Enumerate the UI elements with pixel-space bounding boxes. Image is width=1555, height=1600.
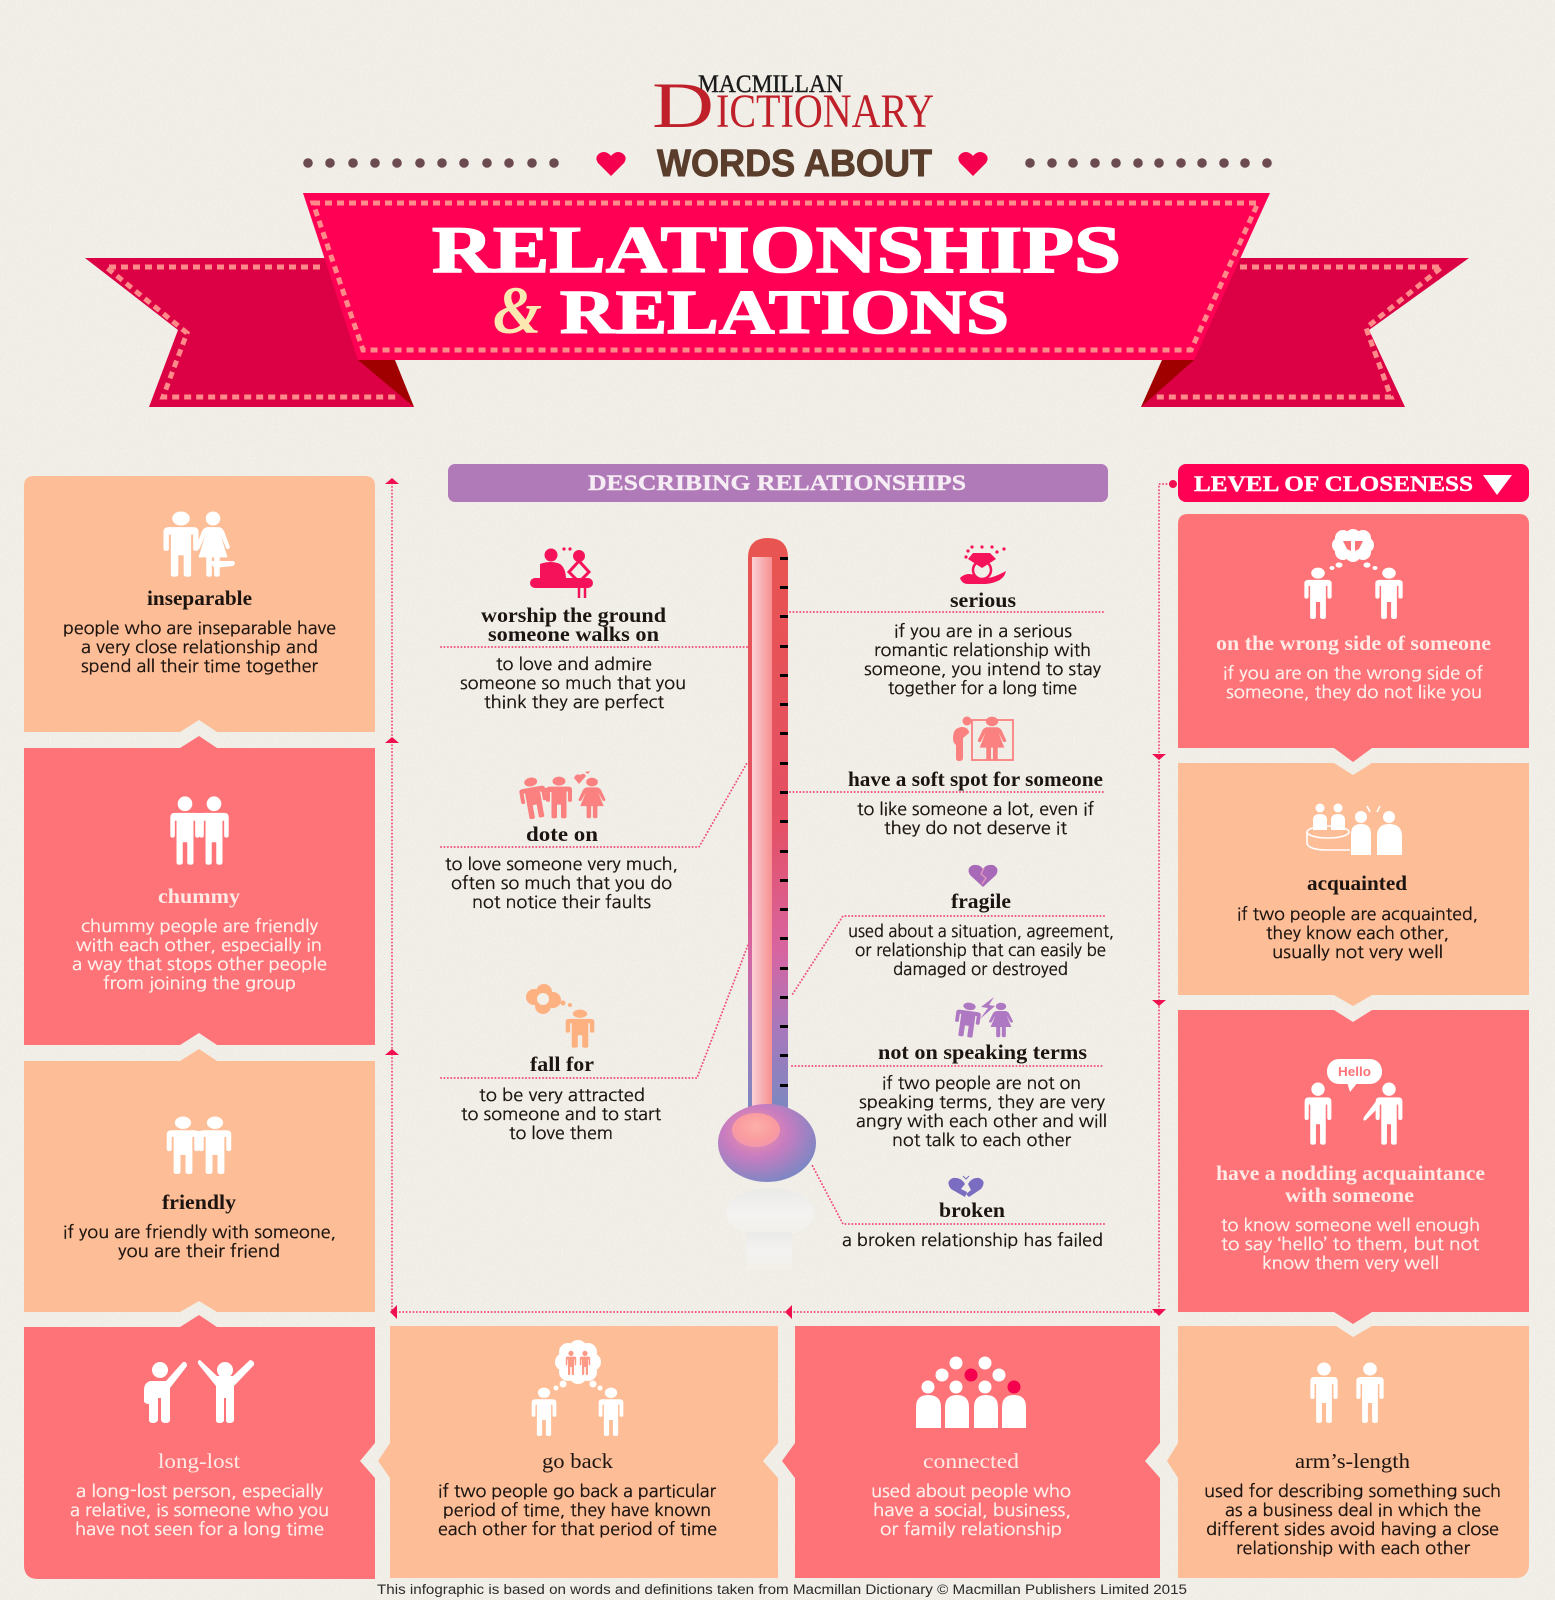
definition [856,1075,1107,1149]
definition: they do not deserve it [884,820,1068,837]
definition [70,1483,329,1538]
icon: two people saying hello [1305,1059,1402,1145]
title ribbon banner: RELATIONS [560,279,1009,347]
definition: if two people are not on [882,1075,1081,1092]
definition: not notice their faults [472,894,651,911]
definition: as a business deal in which the [1225,1502,1481,1519]
panel: acquainted [1178,763,1529,1006]
definition: someone so much that you [460,675,686,692]
term: broken [842,1176,1103,1249]
heading: fall for [530,1052,594,1076]
definition: damaged or destroyed [893,961,1068,978]
icon: inseparable couple [163,511,235,577]
definition: to like someone a lot, even if [857,801,1094,818]
dotted arrows around the closeness scale [385,478,1177,1319]
definition: a way that stops other people [72,956,327,973]
definition: if you are on the wrong side of [1223,665,1483,682]
definition: to be very attracted [479,1087,645,1104]
heading [1216,1161,1485,1207]
definition: if two people are acquainted, [1237,906,1478,923]
panel: have a nodding acquaintance with someone [1178,1010,1529,1324]
icon: two people with thought cloud [1304,529,1403,619]
heading: acquainted [1307,871,1407,895]
heading: have a nodding acquaintance [1216,1161,1485,1185]
definition: often so much that you do [451,875,672,892]
icon: two people saying hello: Hello [1338,1064,1371,1079]
definition [871,1483,1071,1538]
term: have a soft spot for someone [848,716,1103,837]
heading: worship the ground [481,603,666,627]
definition: used for describing something such [1204,1483,1501,1500]
header: describing relationships [448,464,1108,502]
definition: if two people go back a particular [438,1483,717,1500]
heading: with someone [1285,1183,1414,1207]
heading: long-lost [158,1449,240,1473]
heading: serious [950,588,1016,612]
definition: to someone and to start [461,1106,662,1123]
subtitle row: words about [303,143,1272,185]
definition [461,1087,662,1142]
header: describing relationships: DESCRIBING RELATIONSHIPS [588,470,966,495]
term: not on speaking terms [856,997,1107,1149]
icon: person and figure in frame [953,716,1013,761]
heading [481,603,666,646]
heading: chummy [158,884,241,908]
panel: inseparable [24,476,375,732]
definition: angry with each other and will [856,1113,1107,1130]
icon: person with cloud [526,984,594,1048]
definition: a very close relationship and [81,639,318,656]
definition [63,1224,336,1260]
term: serious [864,545,1101,697]
definition [1223,665,1483,701]
heading: friendly [162,1190,237,1214]
icon: thought cloud of pair between two people [532,1340,623,1436]
definition: or family relationship [880,1521,1062,1538]
term: fall for [461,984,662,1142]
definition: together for a long time [888,680,1077,697]
icon: table and people [1307,804,1402,855]
definition: a broken relationship has failed [842,1232,1103,1249]
logo: Macmillan Dictionary: ICTIONARY [716,85,934,138]
icon: friendly pair [167,1117,231,1174]
definition: if you are in a serious [894,623,1072,640]
definition [1204,1483,1501,1557]
definition: spend all their time together [81,658,319,675]
header: level of closeness: LEVEL OF CLOSENESS [1194,471,1473,496]
title ribbon banner: RELATIONSHIPS [432,213,1121,287]
logo: Macmillan Dictionary: MACMILLAN [698,71,843,98]
panel: connected [782,1326,1160,1578]
definition [848,923,1114,978]
definition: have a social, business, [873,1502,1071,1519]
definition: think they are perfect [484,694,665,711]
panel: on the wrong side of someone [1178,514,1529,762]
definition [1237,906,1478,961]
definition: or relationship that can easily be [855,942,1106,959]
definition [460,656,686,711]
definition: someone, you intend to stay [864,661,1101,678]
icon: worship [530,547,593,598]
definition: they know each other, [1266,925,1449,942]
definition: different sides avoid having a close [1206,1521,1499,1538]
icon: arguing couple [953,997,1013,1039]
definition: speaking terms, they are very [859,1094,1105,1111]
definition: people who are inseparable have [63,620,336,637]
heading: broken [939,1198,1005,1222]
icon: two people apart [1310,1362,1384,1423]
term: dote on [445,771,678,911]
definition: someone, they do not like you [1226,684,1482,701]
icon: cracked heart [969,865,997,887]
icon: chummy pair [170,796,229,865]
title ribbon banner [85,193,1469,407]
icon: broken heart [948,1176,984,1197]
term: worship the ground someone walks on [460,547,686,711]
heading: dote on [526,822,598,846]
definition: with each other, especially in [76,937,322,954]
panel: friendly [24,1049,375,1312]
icon: three figures with hearts [517,771,606,820]
heading: go back [542,1449,614,1473]
definition: relationship with each other [1236,1540,1471,1557]
definition: know them very well [1262,1255,1439,1272]
definition: to love and admire [496,656,652,673]
heading: not on speaking terms [878,1040,1087,1064]
definition [864,623,1101,697]
definition: to know someone well enough [1221,1217,1480,1234]
thermometer [718,538,816,1270]
heading: inseparable [147,586,252,610]
definition: a relative, is someone who you [70,1502,329,1519]
panel: go back [378,1326,778,1578]
definition: used about people who [871,1483,1071,1500]
definition: not talk to each other [892,1132,1072,1149]
icon: connected crowd [916,1356,1026,1428]
definition: have not seen for a long time [75,1521,324,1538]
title ribbon banner: & [493,272,542,348]
heading: on the wrong side of someone [1216,631,1491,655]
definition: from joining the group [103,975,296,994]
definition: a long-lost person, especially [76,1483,323,1500]
definition [857,801,1094,837]
definition: each other for that period of time [438,1521,717,1538]
definition [438,1483,717,1538]
panel: long-lost [24,1315,375,1579]
heading: connected [923,1449,1020,1473]
heading: arm’s-length [1295,1449,1411,1473]
logo: Macmillan Dictionary: D [652,70,714,142]
definition: usually not very well [1272,944,1443,961]
subtitle row: words about: WORDS ABOUT [657,143,932,185]
logo: Macmillan Dictionary [652,70,934,142]
definition [1221,1217,1480,1272]
definition: to love them [509,1125,613,1142]
definition: to love someone very much, [445,856,678,873]
definition: if you are friendly with someone, [63,1224,336,1241]
panel: arm's-length [1167,1326,1529,1578]
header: level of closeness [1178,464,1529,502]
panel: chummy [24,736,375,1045]
definition: romantic relationship with [874,642,1091,659]
icon: two people waving [144,1360,254,1423]
heading: have a soft spot for someone [848,767,1103,791]
heading: someone walks on [488,622,659,646]
footer credit: This infographic is based on words and definitions taken from Macmillan Dictionary © Macmillan Publishers Limited 2015 [377,1582,1187,1597]
thermometer leader lines [441,612,1104,1224]
definition: you are their friend [118,1243,280,1260]
definition [63,620,336,675]
definition: chummy people are friendly [81,918,318,935]
definition: used about a situation, agreement, [848,923,1114,940]
definition [72,918,327,994]
term: fragile [848,865,1114,978]
icon: ring on a hand [960,545,1006,584]
definition: period of time, they have known [443,1502,711,1519]
heading: fragile [951,889,1011,913]
definition [445,856,678,911]
definition: to say ‘hello’ to them, but not [1221,1235,1480,1253]
